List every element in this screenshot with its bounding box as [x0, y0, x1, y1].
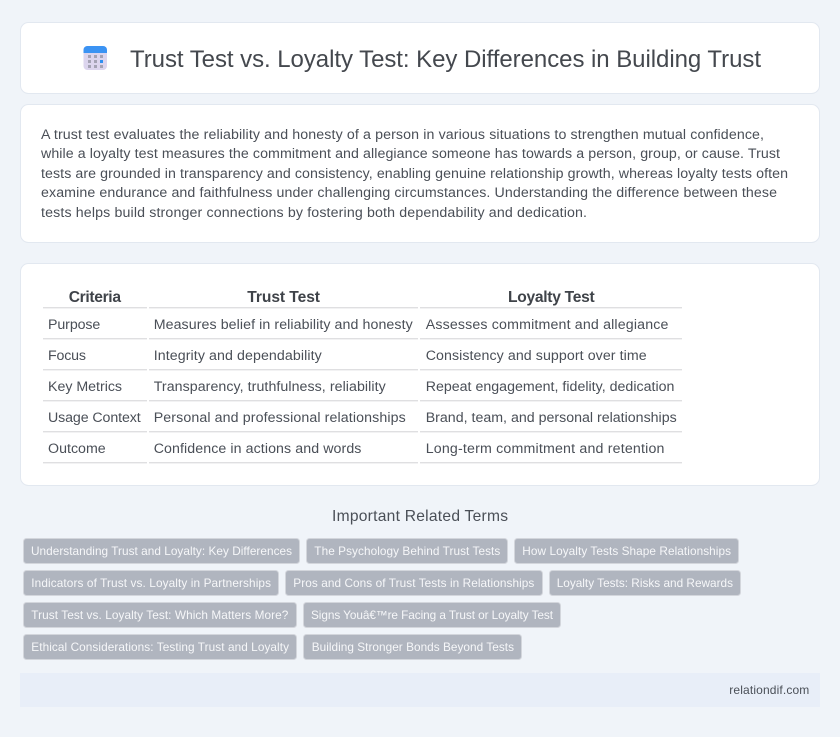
table row: focus: Consistency and support over time	[426, 348, 647, 364]
tag: Loyalty Tests: Risks and Rewards	[557, 576, 733, 590]
tag: How Loyalty Tests Shape Relationships	[522, 544, 731, 558]
footer	[20, 673, 820, 707]
tag	[286, 570, 542, 596]
table row: purpose: Measures belief in reliability and honesty	[154, 317, 414, 333]
tag: Pros and Cons of Trust Tests in Relationships	[293, 576, 534, 590]
footer site name: relationdif.com	[729, 683, 809, 697]
tag	[306, 538, 508, 564]
table row: focus: Integrity and dependability	[154, 348, 323, 364]
table header row	[43, 289, 682, 308]
table row: key metrics	[43, 379, 682, 401]
title: Trust Test vs. Loyalty Test: Key Differences in Building Trust	[130, 46, 761, 73]
table row: outcome: Confidence in actions and words	[154, 441, 361, 457]
table row: purpose: Purpose	[48, 317, 100, 333]
table row: usage context: Usage Context	[48, 410, 141, 426]
table row: key metrics: Key Metrics	[48, 379, 122, 395]
related terms tags	[24, 538, 740, 660]
table row: key metrics: Transparency, truthfulness, reliability	[154, 379, 387, 395]
panel: comparison table	[20, 264, 820, 486]
intro paragraph: while a loyalty test measures the commitment and allegiance someone has towards a person, group, or cause. Trust	[40, 146, 780, 162]
tag	[304, 634, 522, 660]
intro paragraph: tests are grounded in transparency and consistency, enabling genuine relationship growth, whereas loyalty tests often	[41, 166, 788, 182]
tag: Trust Test vs. Loyalty Test: Which Matters More?	[31, 608, 289, 622]
table row: usage context	[43, 410, 682, 432]
tag: Ethical Considerations: Testing Trust and Loyalty	[31, 640, 289, 654]
heading: important related terms: Important Related Terms	[332, 508, 508, 525]
table row: focus: Focus	[48, 348, 86, 364]
table row: purpose	[43, 317, 682, 339]
table row: outcome: Long-term commitment and retention	[426, 441, 664, 457]
tag	[304, 602, 560, 628]
tag: The Psychology Behind Trust Tests	[314, 544, 500, 558]
intro paragraph	[40, 127, 788, 221]
panel: header	[20, 22, 820, 94]
table row: usage context: Brand, team, and personal relationships	[426, 410, 677, 426]
tag	[24, 570, 278, 596]
intro paragraph: A trust test evaluates the reliability and honesty of a person in various situations to strengthen mutual confidence,	[41, 127, 764, 143]
table row: outcome	[43, 441, 682, 463]
table row: key metrics: Repeat engagement, fidelity, dedication	[426, 379, 674, 395]
table row: usage context: Personal and professional relationships	[154, 410, 406, 426]
table row: purpose: Assesses commitment and allegiance	[426, 317, 669, 333]
table header row: Trust Test	[247, 289, 320, 306]
intro paragraph: examine endurance and faithfulness under challenging circumstances. Understanding the difference between these	[41, 185, 777, 201]
tag	[24, 538, 300, 564]
table row: focus	[43, 348, 682, 370]
table header row: Loyalty Test	[508, 289, 595, 306]
panel: introduction	[20, 104, 820, 242]
tag: Building Stronger Bonds Beyond Tests	[312, 640, 514, 654]
tag: Signs Youâ€™re Facing a Trust or Loyalty Test	[311, 608, 554, 622]
tag	[550, 570, 740, 596]
icon: calendar	[84, 46, 107, 70]
tag	[24, 634, 296, 660]
table row: outcome: Outcome	[48, 441, 106, 457]
tag: Indicators of Trust vs. Loyalty in Partnerships	[31, 576, 271, 590]
table header row: Criteria	[69, 289, 121, 306]
tag	[514, 538, 738, 564]
intro paragraph: tests helps build stronger connections by fostering both dependability and dedication.	[41, 205, 587, 221]
tag: Understanding Trust and Loyalty: Key Differences	[31, 544, 292, 558]
tag	[24, 602, 296, 628]
